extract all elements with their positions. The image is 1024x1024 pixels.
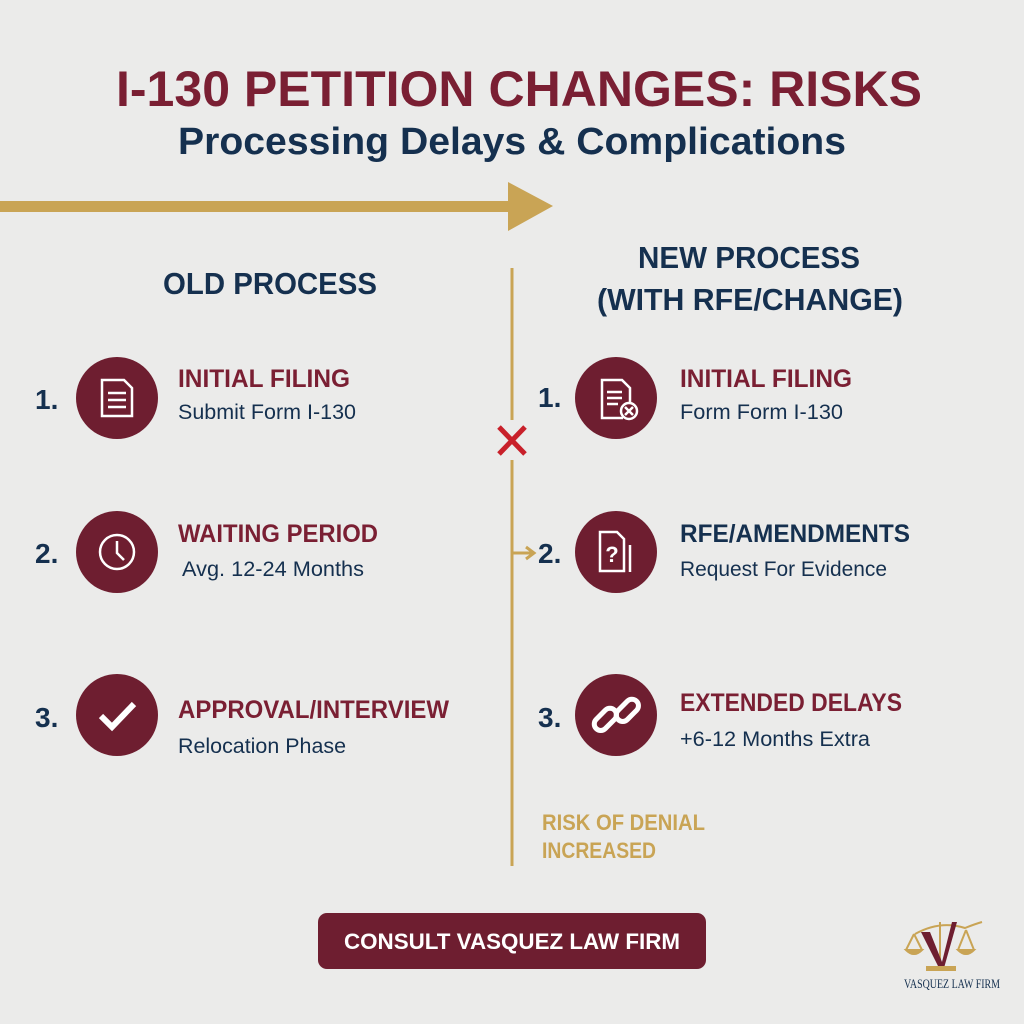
panel: new step 2: RFE/AMENDMENTS: [680, 520, 910, 548]
heading: old process: OLD PROCESS: [163, 266, 377, 301]
heading: new process: NEW PROCESS: [638, 240, 860, 275]
panel: old step 1: Submit Form I-130: [178, 401, 356, 424]
button: consult: CONSULT VASQUEZ LAW FIRM: [344, 929, 680, 954]
panel: old step 3: 3.: [35, 702, 58, 733]
divider line with break: [512, 268, 534, 866]
panel: old step 2: Avg. 12-24 Months: [182, 558, 364, 581]
panel: new step 1: INITIAL FILING: [680, 365, 852, 393]
panel: new step 2: 2.: [538, 538, 561, 569]
callout: risk of denial: INCREASED: [542, 838, 656, 863]
button: consult: [318, 913, 706, 969]
heading: new process: [597, 240, 903, 317]
panel: old step 1: 1.: [35, 384, 58, 415]
panel: old step 2: 2.: [35, 538, 58, 569]
arrow: timeline: [0, 182, 553, 231]
panel: new step 1: [538, 357, 852, 439]
panel: new step 2: Request For Evidence: [680, 558, 887, 581]
heading: new process: (WITH RFE/CHANGE): [597, 282, 903, 317]
panel: new step 1: Form Form I-130: [680, 401, 843, 424]
callout: risk of denial: RISK OF DENIAL: [542, 810, 705, 835]
panel: old step 3: APPROVAL/INTERVIEW: [178, 696, 449, 724]
panel: old step 1: INITIAL FILING: [178, 365, 350, 393]
panel: new step 3: 3.: [538, 702, 561, 733]
panel: new step 3: [538, 674, 902, 756]
panel: new step 3: EXTENDED DELAYS: [680, 689, 902, 717]
icon: red x: [499, 427, 525, 454]
panel: new step 2: [538, 511, 910, 593]
panel: old step 2: [35, 511, 378, 593]
title: Processing Delays & Complications: [178, 121, 846, 163]
logo: vasquez law firm: [904, 922, 1000, 991]
panel: old step 1: [35, 357, 356, 439]
panel: old step 3: Relocation Phase: [178, 735, 346, 758]
panel: old step 3: [35, 674, 449, 758]
callout: risk of denial: [542, 810, 705, 863]
panel: new step 1: 1.: [538, 382, 561, 413]
panel: new step 2: ?: [605, 542, 619, 567]
panel: new step 3: +6-12 Months Extra: [680, 728, 870, 751]
title: I-130 PETITION CHANGES: RISKS: [116, 61, 922, 117]
title: [116, 61, 922, 163]
panel: old step 2: WAITING PERIOD: [178, 520, 378, 548]
